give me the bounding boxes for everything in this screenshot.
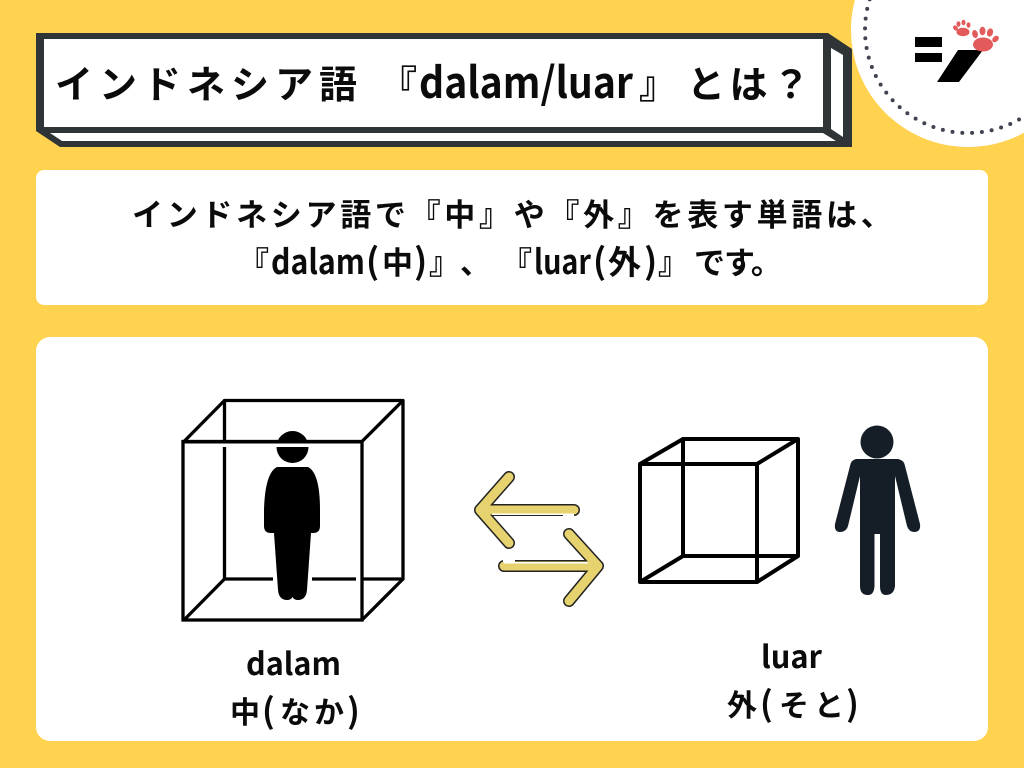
panel: illustration bbox=[36, 337, 988, 741]
intro line 2: 、 bbox=[460, 238, 491, 283]
label: soto: ) bbox=[846, 677, 859, 726]
icon: exchange arrows bbox=[480, 477, 598, 601]
panel: intro text bbox=[36, 170, 988, 305]
intro line 2: ( bbox=[366, 234, 379, 285]
intro line 2: 中 bbox=[382, 238, 413, 283]
title text: インドネシア語 bbox=[55, 54, 363, 109]
intro line 2: です。 bbox=[694, 238, 781, 283]
logo badge bbox=[851, 0, 1024, 147]
intro line 2: 『 bbox=[501, 238, 532, 283]
cube outside bbox=[640, 439, 798, 582]
intro line 2: luar bbox=[534, 235, 591, 284]
intro line 2: 』 bbox=[429, 238, 460, 283]
intro line 2: ( bbox=[593, 234, 606, 285]
label: naka: か bbox=[314, 688, 344, 732]
person outside cube bbox=[835, 426, 920, 595]
intro line 2: 外 bbox=[608, 236, 641, 284]
label: naka: 中 bbox=[230, 688, 260, 732]
intro line 2: ) bbox=[644, 234, 657, 285]
intro line 2: dalam bbox=[271, 235, 365, 284]
label: soto: そ bbox=[779, 681, 809, 725]
label: soto: ( bbox=[760, 677, 773, 726]
title text: とは？ bbox=[687, 54, 815, 109]
label: luar: luar bbox=[761, 632, 822, 677]
label: naka: ) bbox=[347, 684, 360, 733]
cube with person inside bbox=[183, 400, 403, 620]
title latin text: dalam/luar bbox=[419, 49, 633, 111]
intro line 2: ) bbox=[414, 234, 427, 285]
intro line 2: 『 bbox=[238, 238, 269, 283]
title banner bbox=[36, 33, 852, 147]
person inside cube bbox=[183, 431, 363, 600]
title text: 『 bbox=[379, 54, 417, 109]
intro line 2: 』 bbox=[658, 238, 689, 283]
label: soto: と bbox=[814, 681, 844, 725]
label: dalam: dalam bbox=[246, 639, 341, 684]
intro line 1: インドネシア語で『中』や『外』を表す単語は、 bbox=[132, 190, 895, 235]
label: naka: な bbox=[280, 688, 310, 732]
label: soto: 外 bbox=[727, 681, 757, 725]
label: naka: ( bbox=[262, 684, 275, 733]
title text: 』 bbox=[639, 54, 677, 109]
